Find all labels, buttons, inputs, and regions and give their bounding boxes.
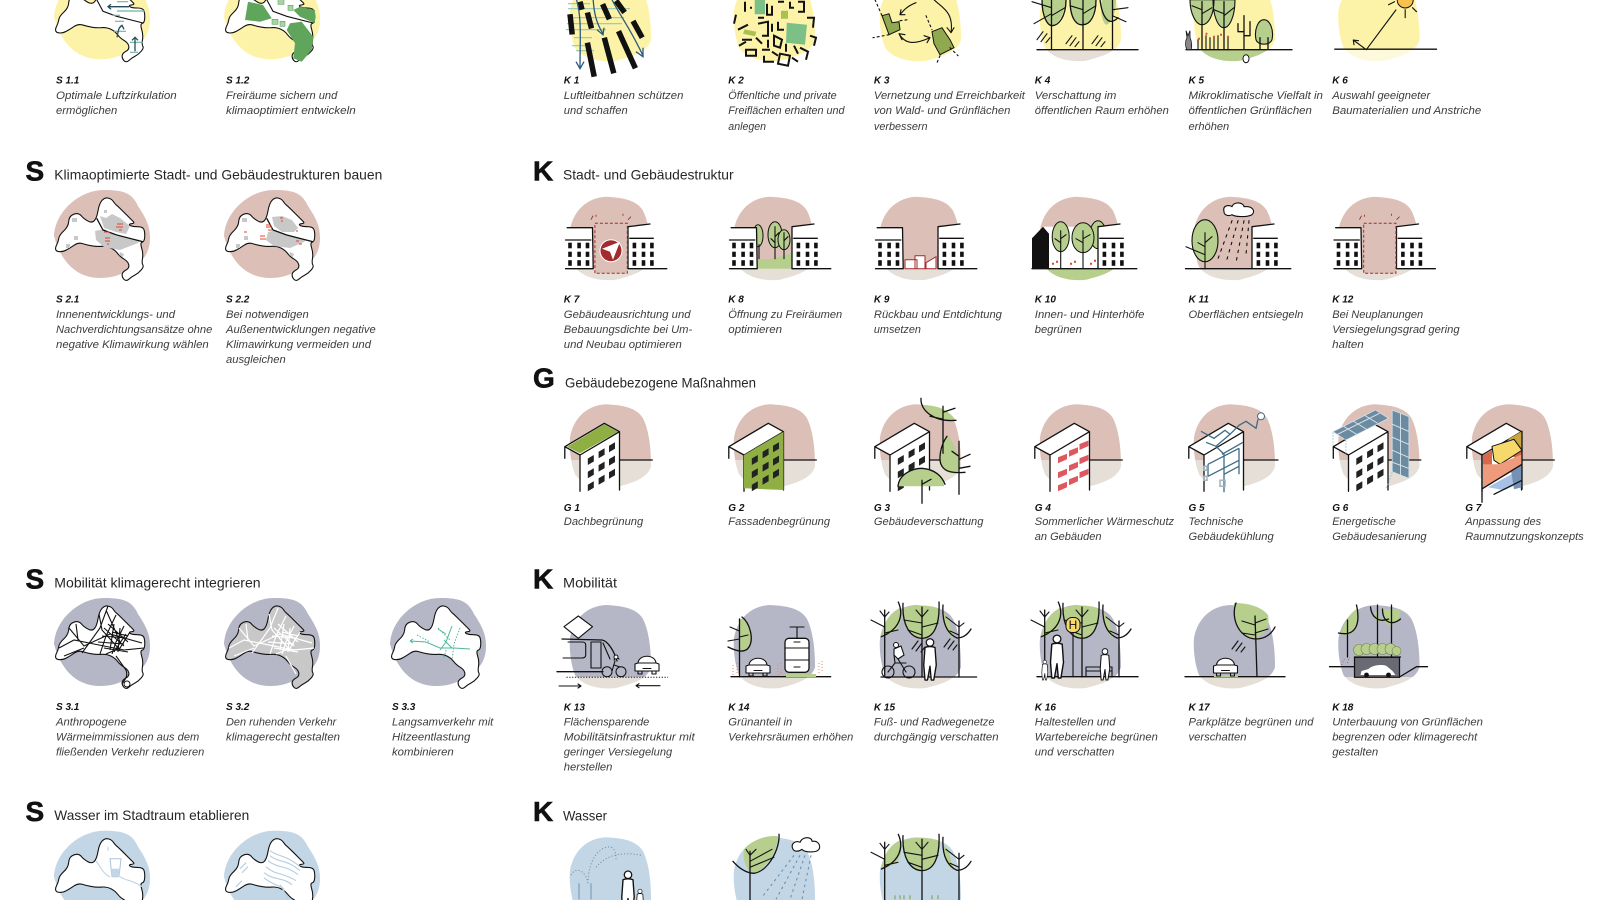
icon: shading in public space <box>1032 0 1138 61</box>
code: K 14 <box>728 702 750 714</box>
description: Freiräume sichern und <box>226 90 338 102</box>
icon: space-saving mobility infrastructure <box>556 605 668 688</box>
icon: map water sensitive surfaces <box>224 831 320 900</box>
item: G 7 <box>1464 404 1584 543</box>
icon: green roof <box>565 404 652 492</box>
description <box>392 717 494 759</box>
description <box>1332 717 1483 759</box>
description: Vernetzung und Erreichbarkeit <box>874 90 1026 102</box>
description <box>728 90 845 133</box>
item: K 3 <box>873 0 1026 133</box>
icon: building shading by trees <box>875 398 970 503</box>
heading: S Wasser im Stadtraum etablieren: S <box>26 796 44 827</box>
description: Gebäudesanierung <box>1332 531 1427 543</box>
description: Wartebereiche begrünen <box>1035 732 1158 744</box>
item: K 14 <box>728 605 853 744</box>
icon: map air circulation <box>54 0 150 62</box>
code: S 2.1 <box>56 294 80 306</box>
icon: connecting green spaces <box>873 0 961 63</box>
icon: technical building cooling <box>1189 404 1278 492</box>
description: Nachverdichtungsansätze ohne <box>56 324 212 336</box>
description: Rückbau und Entdichtung <box>874 309 1003 321</box>
code: G 1 <box>564 503 580 514</box>
code: K 12 <box>1332 294 1354 306</box>
heading: K Stadt- und Gebäudestruktur: K <box>533 156 553 186</box>
description: Innen- und Hinterhöfe <box>1035 309 1144 321</box>
description: Öffenltiche und private <box>728 90 837 102</box>
icon: greening courtyards <box>1032 197 1137 280</box>
description: Flächensparende <box>564 717 649 729</box>
description <box>874 717 999 744</box>
description: halten <box>1332 339 1364 351</box>
heading: K Mobilität: Mobilität <box>563 576 617 591</box>
item: G 4 <box>1035 404 1174 543</box>
icon: map inner development <box>54 190 150 280</box>
item: K 10 <box>1032 197 1144 336</box>
icon: unsealing surfaces <box>1186 197 1291 280</box>
code: K 8 <box>728 294 744 306</box>
code: S 3.3 <box>392 702 416 713</box>
item: K 11 <box>1186 197 1303 321</box>
description: Gebäudeausrichtung und <box>564 309 691 321</box>
description <box>1188 516 1274 543</box>
description: Innenentwicklungs- und <box>56 309 176 321</box>
code: K 11 <box>1188 294 1209 306</box>
description: Anpassung des <box>1464 516 1541 528</box>
description: Baumaterialien und Anstriche <box>1332 105 1481 117</box>
description: Wärmeimmissionen aus dem <box>56 732 199 744</box>
code: K 13 <box>564 702 585 714</box>
description: Außenentwicklungen negative <box>225 324 376 336</box>
icon: low sealing in new planning <box>1334 197 1435 280</box>
description: ausgleichen <box>226 354 286 366</box>
icon: map traffic heat emissions <box>54 598 150 688</box>
description: Haltestellen und <box>1035 717 1116 729</box>
item: S 2.1 <box>54 190 212 351</box>
item: K 9 <box>874 197 1003 336</box>
code: G 6 <box>1332 503 1349 514</box>
item: K 12 <box>1332 197 1460 351</box>
description <box>226 90 356 117</box>
description: Verschattung im <box>1035 90 1116 102</box>
description: gestalten <box>1332 747 1378 759</box>
icon: energetic refurbishment with solar panels <box>1333 404 1421 492</box>
heading: K Stadt- und Gebäudestruktur: Stadt- und Gebäudestruktur <box>563 168 734 182</box>
description: ermöglichen <box>56 105 117 117</box>
description: geringer Versiegelung <box>564 747 673 759</box>
description <box>225 309 376 366</box>
item: S 3.1 <box>54 598 204 759</box>
description: optimieren <box>728 324 782 336</box>
description: Dachbegrünung <box>564 516 644 528</box>
description: Freiflächen erhalten und <box>728 105 845 117</box>
item: S 1.2 <box>224 0 356 117</box>
description <box>55 717 204 759</box>
code: S 3.2 <box>226 702 250 713</box>
description: erhöhen <box>1188 121 1229 133</box>
item: S 1.1 <box>54 0 177 117</box>
description: Mikroklimatische Vielfalt in <box>1188 90 1323 102</box>
description <box>1331 90 1481 117</box>
code: K 5 <box>1188 76 1204 86</box>
code: K 17 <box>1188 702 1210 714</box>
item: S 2.2 <box>224 190 376 366</box>
heading: S Klimaoptimierte Stadt- und Gebäudestrukturen bauen: S <box>26 156 44 186</box>
description: begrenzen oder klimagerecht <box>1332 732 1478 744</box>
heading: S Wasser im Stadtraum etablieren <box>26 796 249 827</box>
description: Parkplätze begrünen und <box>1188 717 1314 729</box>
code: G 5 <box>1188 503 1205 514</box>
code: G 2 <box>728 503 745 514</box>
icon: map outer development <box>224 190 320 280</box>
description <box>564 717 696 774</box>
heading: S Mobilität klimagerecht integrieren: Mobilität klimagerecht integrieren <box>54 576 261 590</box>
icon: opening towards open spaces <box>730 197 831 280</box>
heading: S Klimaoptimierte Stadt- und Gebäudestrukturen bauen: Klimaoptimierte Stadt- und Gebäudestrukturen bauen <box>54 168 382 182</box>
description: klimaoptimiert entwickeln <box>226 105 356 117</box>
description: umsetzen <box>874 324 921 336</box>
description: herstellen <box>564 762 612 774</box>
item: G 1 <box>564 404 652 528</box>
description: Raumnutzungskonzepts <box>1465 531 1584 543</box>
heading: K Mobilität <box>533 564 617 594</box>
icon: green share in traffic spaces <box>728 605 831 688</box>
description <box>1332 309 1460 351</box>
code: K 2 <box>728 76 744 86</box>
description: Klimawirkung vermeiden und <box>226 339 372 351</box>
icon: tree with rainwater <box>733 834 820 900</box>
code: S 2.2 <box>226 294 250 306</box>
icon: air corridors <box>566 0 651 77</box>
code: K 1 <box>564 76 580 86</box>
code: K 4 <box>1035 76 1051 86</box>
code: K 3 <box>874 76 890 86</box>
item: K 8 <box>728 197 842 336</box>
icon: building orientation <box>566 197 667 280</box>
icon: map stationary traffic <box>224 598 320 688</box>
item: K 4 <box>1032 0 1169 117</box>
heading: K Wasser: K <box>533 796 553 827</box>
code: K 7 <box>564 294 580 306</box>
code: G 3 <box>874 503 890 514</box>
description: durchgängig verschatten <box>874 732 999 744</box>
heading: S Klimaoptimierte Stadt- und Gebäudestrukturen bauen <box>26 156 382 186</box>
description <box>874 309 1003 336</box>
description: und verschatten <box>1035 747 1114 759</box>
description: öffentlichen Grünflächen <box>1188 105 1312 117</box>
description: Mobilitätsinfrastruktur mit <box>564 732 696 744</box>
description: Anthropogene <box>55 717 127 729</box>
item: K 18 <box>1330 605 1483 759</box>
icon: adapting room use concept <box>1467 404 1554 502</box>
description: Optimale Luftzirkulation <box>56 90 177 102</box>
icon: demolition and de-densification <box>876 197 977 280</box>
item: K 6 <box>1331 0 1481 117</box>
description: verschatten <box>1188 732 1246 744</box>
description: Grünanteil in <box>728 717 792 729</box>
item: G 5 <box>1188 404 1278 543</box>
description: fließenden Verkehr reduzieren <box>56 747 204 759</box>
icon: shaded stops and waiting areas <box>1031 602 1138 688</box>
description <box>226 717 340 744</box>
description <box>728 309 842 336</box>
description: von Wald- und Grünflächen <box>874 105 1010 117</box>
description: Fassadenbegrünung <box>728 516 831 528</box>
icon: map open spaces <box>224 0 320 62</box>
description: Den ruhenden Verkehr <box>226 717 337 729</box>
item: G 3 <box>874 398 984 528</box>
code: S 1.2 <box>226 76 250 86</box>
code: K 10 <box>1035 294 1056 306</box>
description: an Gebäuden <box>1035 531 1102 543</box>
item: K 2 <box>728 0 845 133</box>
item: K 7 <box>564 197 692 351</box>
description: kombinieren <box>392 747 454 759</box>
item: S 3.3 <box>390 598 494 759</box>
description: Luftleitbahnen schützen <box>564 90 683 102</box>
description: Hitzeentlastung <box>392 732 471 744</box>
heading: K Wasser <box>533 796 607 827</box>
description: Oberflächen entsiegeln <box>1188 309 1303 321</box>
description <box>1035 516 1174 543</box>
description: Gebäudeverschattung <box>874 516 984 528</box>
icon: open spaces in block plan <box>734 0 816 66</box>
description <box>1035 90 1169 117</box>
description <box>564 90 683 117</box>
description: Unterbauung von Grünflächen <box>1332 717 1483 729</box>
code: G 4 <box>1035 503 1051 514</box>
description: Versiegelungsgrad gering <box>1332 324 1460 336</box>
heading: S Mobilität klimagerecht integrieren: S <box>26 564 44 594</box>
item: K 1 <box>564 0 683 117</box>
description: Öffnung zu Freiräumen <box>728 309 842 321</box>
description: Bei notwendigen <box>226 309 309 321</box>
item: K 16 <box>1031 602 1158 759</box>
description: Fuß- und Radwegenetze <box>874 717 994 729</box>
icon: summer heat protection <box>1035 404 1122 492</box>
description <box>1188 90 1323 133</box>
heading: K Mobilität: K <box>533 564 553 594</box>
description: Verkehrsräumen erhöhen <box>728 732 853 744</box>
description <box>728 717 853 744</box>
description <box>1464 516 1584 543</box>
icon: underground parking below green space <box>1330 605 1428 688</box>
heading: K Wasser: Wasser <box>563 808 607 824</box>
description <box>1332 516 1427 543</box>
description <box>56 309 212 351</box>
code: K 15 <box>874 702 895 714</box>
description: Bei Neuplanungen <box>1332 309 1423 321</box>
heading: S Wasser im Stadtraum etablieren: Wasser im Stadtraum etablieren <box>54 808 249 823</box>
description <box>564 309 692 351</box>
description: anlegen <box>728 121 766 133</box>
description: negative Klimawirkung wählen <box>56 339 209 351</box>
code: S 1.1 <box>56 76 80 86</box>
code: G 7 <box>1465 503 1482 514</box>
code: S 3.1 <box>56 702 80 713</box>
item: K 5 <box>1185 0 1323 133</box>
code: K 16 <box>1035 702 1056 714</box>
code: K 6 <box>1332 76 1348 86</box>
item: K 17 <box>1185 603 1314 744</box>
heading: G Gebäudebezogene Maßnahmen: Gebäudebezogene Maßnahmen <box>565 375 756 390</box>
description <box>1188 717 1314 744</box>
icon: green shaded parking <box>1185 603 1285 688</box>
description: klimagerecht gestalten <box>226 732 340 744</box>
icon: microclimatic diversity <box>1185 0 1292 63</box>
icon: shaded foot and cycle paths <box>871 602 977 688</box>
description: und Neubau optimieren <box>564 339 682 351</box>
code: K 18 <box>1332 702 1354 714</box>
icon: map drinking water <box>54 831 150 900</box>
icon: map slow traffic routes <box>390 598 486 688</box>
heading: S Mobilität klimagerecht integrieren <box>26 564 261 594</box>
description: verbessern <box>874 121 928 133</box>
icon: green facade <box>729 404 816 492</box>
code: K 9 <box>874 294 890 306</box>
heading: K Stadt- und Gebäudestruktur <box>533 156 734 186</box>
description: Sommerlicher Wärmeschutz <box>1035 516 1174 528</box>
description: Technische <box>1188 516 1243 528</box>
description <box>56 90 177 117</box>
item: G 2 <box>728 404 831 528</box>
description: Langsamverkehr mit <box>392 717 494 729</box>
description: Bebauungsdichte bei Um- <box>564 324 692 336</box>
item: G 6 <box>1332 404 1427 543</box>
icon: water features for cooling <box>570 837 651 900</box>
icon: trees and planted surfaces for water retention <box>871 834 971 900</box>
heading: G Gebäudebezogene Maßnahmen: G <box>533 362 555 394</box>
description <box>1035 717 1158 759</box>
description: öffentlichen Raum erhöhen <box>1035 105 1169 117</box>
description: Auswahl geeigneter <box>1331 90 1431 102</box>
description: Energetische <box>1332 516 1396 528</box>
heading: G Gebäudebezogene Maßnahmen <box>533 362 756 394</box>
description: begrünen <box>1035 324 1082 336</box>
description: und schaffen <box>564 105 628 117</box>
item: S 3.2 <box>224 598 340 744</box>
icon: sun and building materials <box>1335 0 1436 61</box>
description <box>1035 309 1144 336</box>
description <box>874 90 1026 133</box>
description: Gebäudekühlung <box>1188 531 1274 543</box>
icon: shaded stops and waiting areas: H <box>1069 618 1077 632</box>
item: K 13 <box>556 605 696 774</box>
item: K 15 <box>871 602 999 744</box>
